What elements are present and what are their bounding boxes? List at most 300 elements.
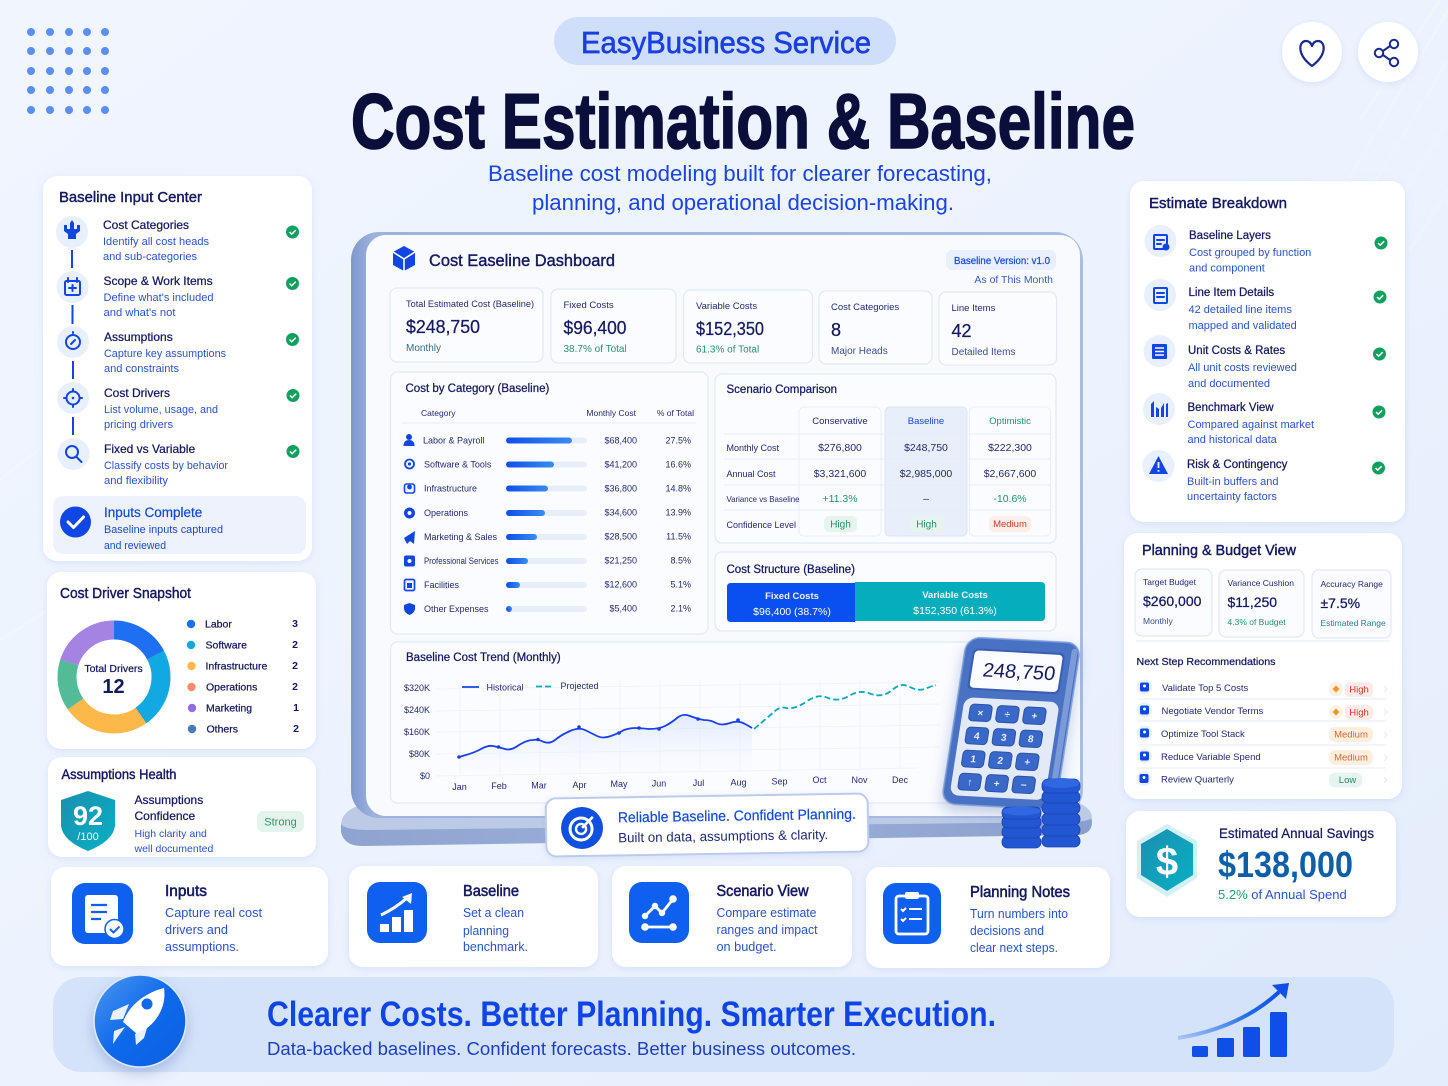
row: professional services: $21,250 — [604, 556, 637, 566]
y axis labels: $0 — [420, 771, 430, 781]
row: infrastructure: 14.8% — [665, 484, 691, 494]
kpi: variable costs: $152,350 — [696, 319, 764, 339]
step: validate top 5 costs — [1137, 680, 1387, 697]
dashboard monitor — [351, 232, 1083, 818]
icon: share button — [1358, 22, 1418, 82]
score shield: /100 — [77, 831, 99, 843]
heading: assumptions health: Assumptions Health — [62, 767, 176, 782]
item: cost drivers: Cost Drivers — [104, 386, 170, 400]
calculator keypad: ÷ — [1004, 710, 1011, 721]
item: baseline layers: and component — [1189, 262, 1265, 274]
row: labor and payroll: $68,400 — [604, 436, 637, 446]
panel: estimated annual savings: 5.2% of Annual Spend — [1218, 887, 1347, 902]
donut centre total: Total Drivers — [84, 663, 143, 675]
step: negotiate vendor terms: High — [1349, 708, 1369, 718]
step: reduce variable spend: Medium — [1334, 752, 1368, 764]
kpi: variable costs — [684, 290, 812, 363]
kpi: cost categories: Major Heads — [831, 346, 888, 357]
step: optimize tool stack — [1137, 726, 1387, 742]
calculator keypad: 2 — [997, 756, 1004, 767]
item: cost categories: Cost Categories — [103, 218, 189, 232]
item: cost categories: Identify all cost heads — [103, 236, 209, 248]
step: optimize tool stack: Medium — [1334, 730, 1368, 740]
x axis labels: Apr — [572, 780, 587, 790]
item: unit costs and rates: All unit costs reviewed — [1188, 362, 1297, 374]
icon: rising bars — [367, 882, 427, 943]
line: historical — [459, 715, 752, 757]
icon: heart button — [1282, 22, 1342, 82]
card: scenario view: Scenario View — [716, 883, 809, 900]
card: baseline — [349, 866, 598, 967]
item: fixed vs variable: Classify costs by behavior — [104, 460, 228, 472]
decorative dot grid — [27, 28, 109, 114]
x axis labels: Oct — [812, 775, 827, 785]
row: annual cost: Annual Cost — [726, 469, 776, 479]
row: variance vs baseline: +11.3% — [822, 493, 858, 505]
calculator keypad: 3 — [1000, 733, 1008, 744]
row: variance vs baseline: – — [923, 493, 929, 505]
kpi: fixed costs: Fixed Costs — [564, 300, 614, 311]
item: assumptions — [57, 326, 299, 375]
card: planning notes: Turn numbers into — [970, 906, 1068, 921]
chart legend: Historical — [486, 682, 524, 692]
x axis labels: Aug — [730, 778, 747, 788]
step: review quarterly: Low — [1339, 775, 1356, 786]
step: optimize tool stack: Optimize Tool Stack — [1161, 729, 1245, 740]
item: benchmark view: Compared against market — [1188, 419, 1314, 431]
row: marketing and sales — [404, 531, 691, 544]
row: infrastructure: $36,800 — [604, 484, 637, 494]
y axis labels: $240K — [404, 705, 430, 715]
icon: calculator — [941, 637, 1081, 810]
row: facilities: 5.1% — [670, 580, 691, 590]
donut legend: Software — [206, 640, 247, 652]
kpi: line items: Line Items — [952, 303, 996, 314]
item: unit costs and rates — [1144, 335, 1386, 390]
item: cost categories: and sub-categories — [103, 251, 197, 263]
icon: target — [561, 807, 603, 849]
donut legend: 2 — [292, 639, 298, 651]
icon: clipboard — [883, 883, 941, 944]
item: assumptions: Assumptions — [104, 330, 173, 344]
confidence text: well documented — [134, 843, 213, 855]
subtitle: Baseline cost modeling built for clearer forecasting, — [488, 161, 992, 186]
row: labor and payroll: 27.5% — [665, 436, 691, 446]
row: confidence level: Confidence Level — [726, 520, 796, 530]
card: baseline: Set a clean — [463, 905, 524, 920]
item: benchmark view — [1143, 393, 1386, 446]
dashboard header: Cost Easeline Dashboard — [429, 251, 615, 270]
calculator keypad: × — [977, 708, 984, 719]
icon: dollar hexagon — [1137, 824, 1197, 897]
line data points — [457, 717, 740, 759]
callout: reliable baseline: Reliable Baseline. Confident Planning. — [618, 807, 856, 826]
panel: cost by category: Cost by Category (Baseline) — [406, 383, 549, 395]
monitor frame — [351, 232, 1083, 818]
row: variance vs baseline: -10.6% — [993, 493, 1027, 505]
step: reduce variable spend — [1137, 748, 1387, 765]
donut legend: Operations — [206, 682, 257, 694]
calculator keypad: 4 — [973, 731, 981, 742]
donut legend: 3 — [292, 618, 298, 630]
brand pill — [554, 17, 896, 65]
kpi: variance cushion: 4.3% of Budget — [1228, 617, 1286, 627]
donut chart — [49, 612, 179, 742]
row: marketing and sales: Marketing & Sales — [424, 532, 498, 542]
row: confidence level: Medium — [993, 519, 1027, 530]
heading: estimate breakdown: Estimate Breakdown — [1149, 196, 1287, 212]
card: baseline: benchmark. — [463, 939, 528, 954]
icon: dollar hexagon: $ — [1156, 840, 1178, 884]
banner: bottom tagline: Clearer Costs. Better Planning. Smarter Execution. — [267, 995, 996, 1034]
card: inputs: assumptions. — [165, 939, 239, 954]
kpi: accuracy range: Estimated Range — [1320, 618, 1386, 628]
timeline connectors — [72, 250, 73, 435]
item: scope and work items: Define what's included — [104, 292, 214, 304]
heading: cost driver snapshot: Cost Driver Snapshot — [60, 586, 191, 602]
monitor screen — [366, 235, 1080, 816]
brand pill: EasyBusiness Service — [581, 25, 871, 60]
kpi: variance cushion: Variance Cushion — [1228, 578, 1294, 588]
kpi: target budget: Monthly — [1143, 616, 1174, 626]
scenario columns — [724, 407, 1050, 536]
step: validate top 5 costs: High — [1349, 684, 1369, 696]
panel: baseline input center — [43, 176, 312, 561]
item: cost drivers: List volume, usage, and — [104, 404, 218, 416]
donut legend: Labor — [205, 618, 232, 630]
baseline version badge: As of This Month — [974, 274, 1053, 286]
chart legend — [462, 681, 599, 692]
banner: bottom tagline — [53, 975, 1394, 1072]
kpi: line items — [939, 292, 1056, 365]
item: cost drivers — [57, 382, 300, 431]
kpi: variance cushion — [1219, 570, 1304, 637]
row: facilities: Facilities — [424, 580, 460, 590]
kpi: total estimated cost: $248,750 — [406, 317, 480, 337]
kpi: variance cushion: $11,250 — [1228, 594, 1277, 610]
row: monthly cost: $276,800 — [818, 442, 862, 454]
y axis labels: $160K — [404, 727, 430, 737]
row: variance vs baseline: Variance vs Baseline — [726, 494, 800, 504]
row: annual cost: $2,985,000 — [900, 468, 952, 480]
row: professional services — [404, 556, 691, 566]
item: fixed vs variable: and flexibility — [104, 475, 168, 487]
row: operations: $34,600 — [604, 508, 637, 518]
panel: estimated annual savings: $138,000 — [1218, 844, 1353, 885]
kpi: variable costs: 61.3% of Total — [696, 344, 759, 356]
donut legend: Infrastructure — [206, 660, 268, 672]
step: review quarterly: Review Quarterly — [1161, 774, 1234, 786]
item: benchmark view: Benchmark View — [1188, 402, 1274, 414]
item: risk and contingency: uncertainty factors — [1187, 491, 1277, 503]
confidence text: Confidence — [134, 809, 196, 823]
subtitle — [488, 161, 992, 215]
item: cost drivers: pricing drivers — [104, 419, 174, 431]
baseline version badge: Baseline Version: v1.0 — [954, 255, 1050, 267]
chart legend: Projected — [560, 681, 599, 691]
callout: reliable baseline: Built on data, assumptions & clarity. — [618, 827, 828, 845]
calculator keypad: + — [1023, 757, 1031, 768]
row: labor and payroll: Labor & Payroll — [423, 436, 485, 446]
x axis labels: Sep — [771, 776, 788, 786]
row: other expenses: 2.1% — [670, 604, 691, 614]
icon: document check — [72, 883, 133, 944]
score shield — [61, 791, 115, 851]
scenario column headers — [812, 416, 1031, 427]
item: fixed vs variable — [58, 438, 300, 487]
calculator keypad: + — [1031, 711, 1038, 722]
monitor stand — [341, 800, 1092, 846]
row: annual cost: $3,321,600 — [814, 468, 866, 480]
donut legend: Others — [206, 724, 238, 736]
row: monthly cost: $248,750 — [904, 442, 948, 454]
calculator keypad: − — [1020, 780, 1028, 791]
icon: coin stacks — [1002, 778, 1080, 848]
item: benchmark view: and historical data — [1188, 434, 1278, 446]
item: line item details: mapped and validated — [1188, 320, 1297, 332]
y axis labels: $80K — [409, 749, 430, 759]
status: inputs complete: Inputs Complete — [104, 505, 202, 520]
row: marketing and sales: $28,500 — [604, 532, 637, 542]
calculator display — [967, 648, 1065, 694]
confidence text — [134, 793, 213, 855]
table header: % of Total — [657, 408, 694, 418]
panel: planning and budget view — [1124, 533, 1402, 799]
card: planning notes: decisions and — [970, 923, 1044, 938]
heading: planning and budget view: Planning & Budget View — [1142, 543, 1297, 559]
table header: Monthly Cost — [586, 408, 637, 418]
item: scope and work items: and what's not — [104, 307, 176, 319]
icon: growth chart arrow — [1178, 983, 1289, 1057]
panel: baseline cost trend: Baseline Cost Trend (Monthly) — [406, 652, 561, 664]
card: inputs: Capture real cost — [165, 905, 262, 920]
kpi: fixed costs — [551, 289, 676, 363]
row: confidence level: High — [830, 520, 851, 530]
icon: line graph — [629, 882, 689, 943]
row: monthly cost: $222,300 — [988, 442, 1032, 454]
item: risk and contingency: Built-in buffers and — [1187, 476, 1279, 488]
row: facilities — [404, 580, 691, 590]
row: facilities: $12,600 — [604, 580, 637, 590]
kpi: line items: Detailed Items — [952, 347, 1015, 358]
kpi: target budget — [1135, 569, 1212, 636]
panel: cost by category — [390, 372, 708, 634]
donut centre total — [84, 663, 143, 698]
panel: baseline cost trend — [390, 642, 1056, 803]
area under line — [459, 715, 752, 772]
calculator keypad: 1 — [970, 754, 977, 765]
scenario column headers: Baseline — [908, 416, 944, 427]
y axis labels: $320K — [404, 683, 430, 693]
x axis labels: Jan — [452, 782, 467, 792]
kpi: accuracy range — [1312, 570, 1391, 638]
kpi: cost categories: Cost Categories — [831, 302, 899, 313]
panel: estimate breakdown — [1130, 181, 1405, 522]
panel: scenario comparison: Scenario Comparison — [726, 384, 837, 396]
row: software and tools: Software & Tools — [424, 460, 492, 470]
card: scenario view: ranges and impact — [716, 922, 818, 937]
step: validate top 5 costs: Validate Top 5 Costs — [1162, 683, 1249, 694]
card: inputs: Inputs — [165, 883, 207, 900]
donut legend: 2 — [292, 681, 298, 693]
item: cost categories — [56, 216, 299, 263]
heading: baseline input center: Baseline Input Center — [59, 189, 202, 206]
kpi: total estimated cost: Total Estimated Cost (Baseline) — [406, 299, 534, 310]
row: annual cost: $2,667,600 — [984, 468, 1036, 480]
table header — [421, 408, 694, 418]
banner: bottom tagline: Data-backed baselines. Confident forecasts. Better business outcomes. — [267, 1039, 856, 1059]
row: monthly cost — [726, 442, 1032, 454]
row: professional services: 8.5% — [670, 556, 691, 566]
panel: scenario comparison — [715, 374, 1056, 543]
item: assumptions: and constraints — [104, 363, 179, 375]
item: line item details: 42 detailed line items — [1188, 304, 1292, 316]
card: baseline: planning — [463, 923, 509, 938]
kpi: fixed costs: $96,400 — [564, 318, 626, 338]
row: software and tools: 16.6% — [665, 460, 691, 470]
confidence text: Assumptions — [134, 793, 203, 807]
calculator keypad — [950, 697, 1060, 800]
kpi: cost categories: 8 — [831, 320, 841, 340]
row: other expenses — [404, 603, 691, 615]
kpi: fixed costs: 38.7% of Total — [564, 344, 627, 355]
item: fixed vs variable: Fixed vs Variable — [104, 442, 195, 456]
kpi: target budget: Target Budget — [1143, 577, 1197, 587]
donut legend: 2 — [292, 660, 298, 672]
row: operations — [404, 508, 691, 518]
stacked bar: variable costs: Variable Costs — [922, 590, 988, 601]
row: annual cost — [726, 468, 1036, 480]
row: confidence level: High — [916, 520, 937, 530]
item: scope and work items — [56, 271, 299, 319]
row: marketing and sales: 11.5% — [666, 532, 691, 542]
row: software and tools: $41,200 — [604, 460, 637, 470]
badge: strong — [257, 811, 304, 832]
x axis labels: Mar — [531, 780, 547, 790]
panel: cost driver snapshot — [47, 572, 316, 749]
stacked bar: variable costs: $152,350 (61.3%) — [913, 605, 997, 617]
row: infrastructure — [404, 484, 691, 494]
item: baseline layers — [1144, 225, 1388, 274]
panel: estimated annual savings — [1126, 811, 1396, 917]
card: scenario view: on budget. — [716, 939, 776, 954]
x axis labels: Jun — [652, 778, 666, 788]
item: scope and work items: Scope & Work Items — [104, 274, 213, 288]
kpi: total estimated cost: Monthly — [406, 343, 441, 354]
y axis labels — [404, 683, 430, 781]
card: scenario view — [612, 866, 852, 967]
step: negotiate vendor terms — [1137, 702, 1387, 720]
x axis labels — [452, 775, 908, 792]
stacked bar: variable costs — [855, 582, 1045, 621]
kpi: total estimated cost — [390, 288, 543, 362]
panel: cost structure: Cost Structure (Baseline) — [726, 564, 855, 576]
card: planning notes: clear next steps. — [970, 940, 1058, 955]
row: labor and payroll — [404, 434, 691, 446]
stacked bar: fixed costs: Fixed Costs — [765, 591, 819, 602]
donut legend: Marketing — [206, 702, 252, 714]
item: line item details — [1144, 279, 1386, 332]
calculator display: 248,750 — [981, 660, 1057, 685]
row: other expenses: $5,400 — [609, 604, 637, 614]
item: baseline layers: Cost grouped by function — [1189, 247, 1311, 259]
status: inputs complete: and reviewed — [104, 540, 166, 552]
table header: Category — [421, 408, 456, 418]
row: variance vs baseline — [726, 493, 1027, 505]
scenario column headers: Conservative — [812, 416, 868, 427]
chart gridlines — [435, 680, 940, 776]
item: unit costs and rates: and documented — [1188, 378, 1270, 390]
x axis labels: Dec — [892, 775, 908, 785]
card: planning notes: Planning Notes — [970, 884, 1070, 901]
calculator keypad: ↑ — [966, 777, 973, 788]
donut legend — [187, 618, 299, 736]
donut legend: 1 — [293, 702, 299, 714]
donut legend: 2 — [293, 723, 299, 735]
card: planning notes — [866, 867, 1110, 968]
kpi: accuracy range: ±7.5% — [1320, 595, 1360, 611]
row: monthly cost: Monthly Cost — [726, 443, 780, 453]
confidence text: High clarity and — [134, 828, 207, 840]
callout: reliable baseline — [546, 793, 868, 857]
x axis labels: Feb — [491, 781, 507, 791]
stacked bar: fixed costs — [727, 583, 855, 622]
row: professional services: Professional Services — [424, 556, 499, 566]
subtitle: planning, and operational decision-making. — [532, 190, 954, 215]
kpi: accuracy range: Accuracy Range — [1320, 579, 1383, 589]
card: inputs — [51, 867, 328, 966]
baseline version badge — [946, 250, 1056, 286]
kpi: line items: 42 — [952, 321, 972, 341]
title: Cost Estimation & Baseline — [351, 77, 1135, 165]
scenario column headers: Optimistic — [989, 416, 1031, 427]
step: review quarterly — [1136, 771, 1387, 788]
item: line item details: Line Item Details — [1188, 287, 1274, 299]
dashboard header — [393, 246, 615, 271]
kpi: cost categories — [819, 291, 932, 364]
row: operations: Operations — [424, 508, 469, 518]
item: risk and contingency — [1142, 450, 1385, 503]
item: assumptions: Capture key assumptions — [104, 348, 226, 360]
step: reduce variable spend: Reduce Variable Spend — [1161, 752, 1261, 763]
kpi: target budget: $260,000 — [1143, 593, 1202, 609]
x axis labels: Nov — [851, 775, 868, 785]
heading: next step recommendations: Next Step Recommendations — [1136, 657, 1276, 668]
row: operations: 13.9% — [665, 508, 691, 518]
badge: strong: Strong — [264, 816, 297, 828]
x axis labels: Jul — [693, 778, 704, 788]
step: negotiate vendor terms: Negotiate Vendor Terms — [1162, 706, 1263, 717]
row: confidence level — [726, 516, 1031, 532]
row: other expenses: Other Expenses — [424, 604, 489, 614]
score shield: 92 — [73, 801, 103, 831]
kpi: variable costs: Variable Costs — [696, 301, 757, 312]
item: unit costs and rates: Unit Costs & Rates — [1188, 345, 1285, 357]
stacked bar: fixed costs: $96,400 (38.7%) — [753, 606, 831, 618]
row: software and tools — [405, 460, 691, 470]
row: infrastructure: Infrastructure — [424, 484, 477, 494]
calculator keypad: 8 — [1027, 734, 1035, 745]
calculator keypad: + — [993, 779, 1001, 790]
x axis labels: May — [610, 779, 628, 789]
card: baseline: Baseline — [463, 883, 519, 900]
panel: assumptions health — [48, 757, 316, 857]
panel: cost structure — [715, 552, 1056, 631]
item: risk and contingency: Risk & Contingency — [1187, 459, 1288, 471]
card: inputs: drivers and — [165, 922, 228, 937]
panel: estimated annual savings: Estimated Annual Savings — [1219, 825, 1374, 841]
line: projected — [754, 685, 936, 729]
